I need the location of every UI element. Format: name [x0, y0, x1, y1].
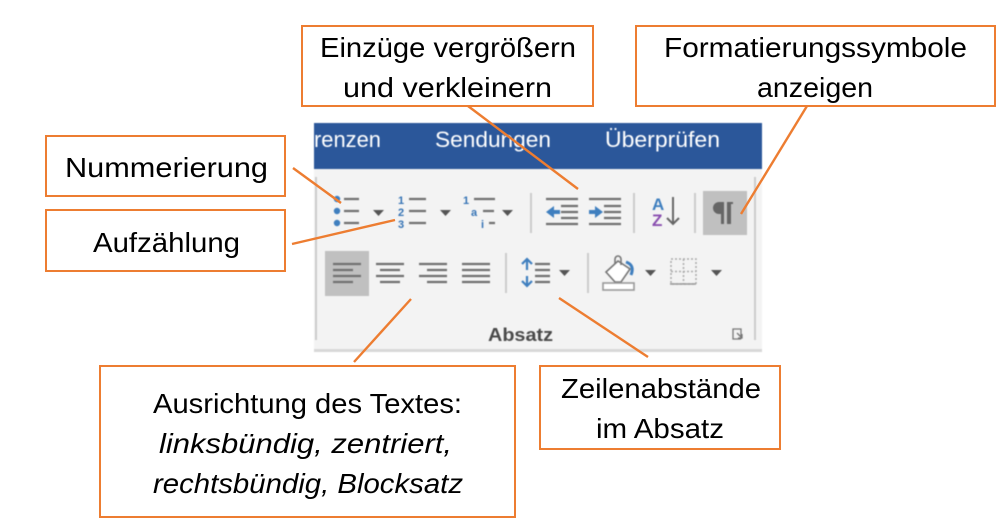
icon: align right: [419, 264, 447, 282]
callout: numbering: Nummerierung: [65, 152, 268, 183]
ribbon tab bar: Überprüfen: [605, 127, 720, 152]
separator: [587, 253, 589, 293]
callout: formatting symbols: [636, 26, 995, 106]
callout: line spacing: im Absatz: [596, 413, 724, 444]
callout: text alignment: rechtsbündig, Blocksatz: [153, 468, 463, 499]
ribbon: Absatz group: [314, 123, 762, 352]
icon: align center: [376, 264, 404, 282]
icon: increase indent: [589, 199, 621, 224]
icon: numbered list: 1: [398, 195, 404, 207]
leader line: formatting symbols: [741, 106, 807, 214]
icon: dialog launcher: [733, 329, 742, 339]
icon: numbered list: 3: [398, 219, 404, 231]
ribbon body: [314, 169, 762, 349]
icon: multilevel list: i: [481, 219, 484, 231]
icon: align left: [325, 251, 369, 296]
icon: borders: [670, 259, 722, 284]
ribbon tab bar: Sendungen: [435, 127, 551, 152]
separator: [694, 193, 696, 233]
callout: text alignment: [100, 366, 515, 517]
callout: indents: und verkleinern: [343, 72, 552, 103]
icon: multilevel list: 1: [463, 195, 469, 207]
icon: multilevel list: a: [471, 207, 478, 219]
leader line: numbering: [293, 168, 341, 203]
callout: formatting symbols: anzeigen: [757, 72, 873, 103]
ribbon tab bar: renzen: [314, 127, 381, 152]
callout: line spacing: Zeilenabstände: [561, 373, 761, 404]
callout: numbering: [46, 136, 285, 196]
icon: shading bucket: [603, 256, 656, 290]
callout: bullets: Aufzählung: [93, 227, 240, 258]
separator: [505, 253, 507, 293]
callout: indents: [302, 26, 593, 106]
icon: bullet list: [334, 196, 384, 226]
icon: numbered list: [398, 195, 451, 231]
callout: formatting symbols: Formatierungssymbole: [664, 32, 967, 63]
icon: justify: [462, 264, 490, 282]
ribbon bottom edge: [314, 349, 762, 352]
icon: sort A-Z: A: [652, 195, 664, 214]
callout: text alignment: linksbündig, zentriert,: [159, 428, 452, 459]
group label: Absatz: [488, 325, 553, 345]
callout: text alignment: Ausrichtung des Textes:: [153, 388, 462, 419]
group borders: [316, 177, 755, 340]
icon: pilcrow button: [703, 191, 747, 235]
leader line: indents: [468, 106, 578, 189]
separator: [633, 193, 635, 233]
icon: line spacing: [522, 259, 570, 286]
icon: numbered list: 2: [398, 207, 404, 219]
separator: [530, 193, 532, 233]
leader line: line spacing: [559, 298, 648, 357]
callout: line spacing: [540, 366, 780, 449]
icon: decrease indent: [546, 199, 578, 224]
icon: multilevel list: [463, 195, 513, 231]
callout: bullets: [46, 210, 285, 271]
ribbon tab bar: [314, 123, 762, 169]
leader line: alignment: [354, 299, 411, 362]
leader line: bullets: [292, 220, 395, 244]
icon: sort A-Z: Z: [652, 211, 662, 230]
icon: sort A-Z: [652, 195, 679, 230]
callout: indents: Einzüge vergrößern: [320, 32, 576, 63]
